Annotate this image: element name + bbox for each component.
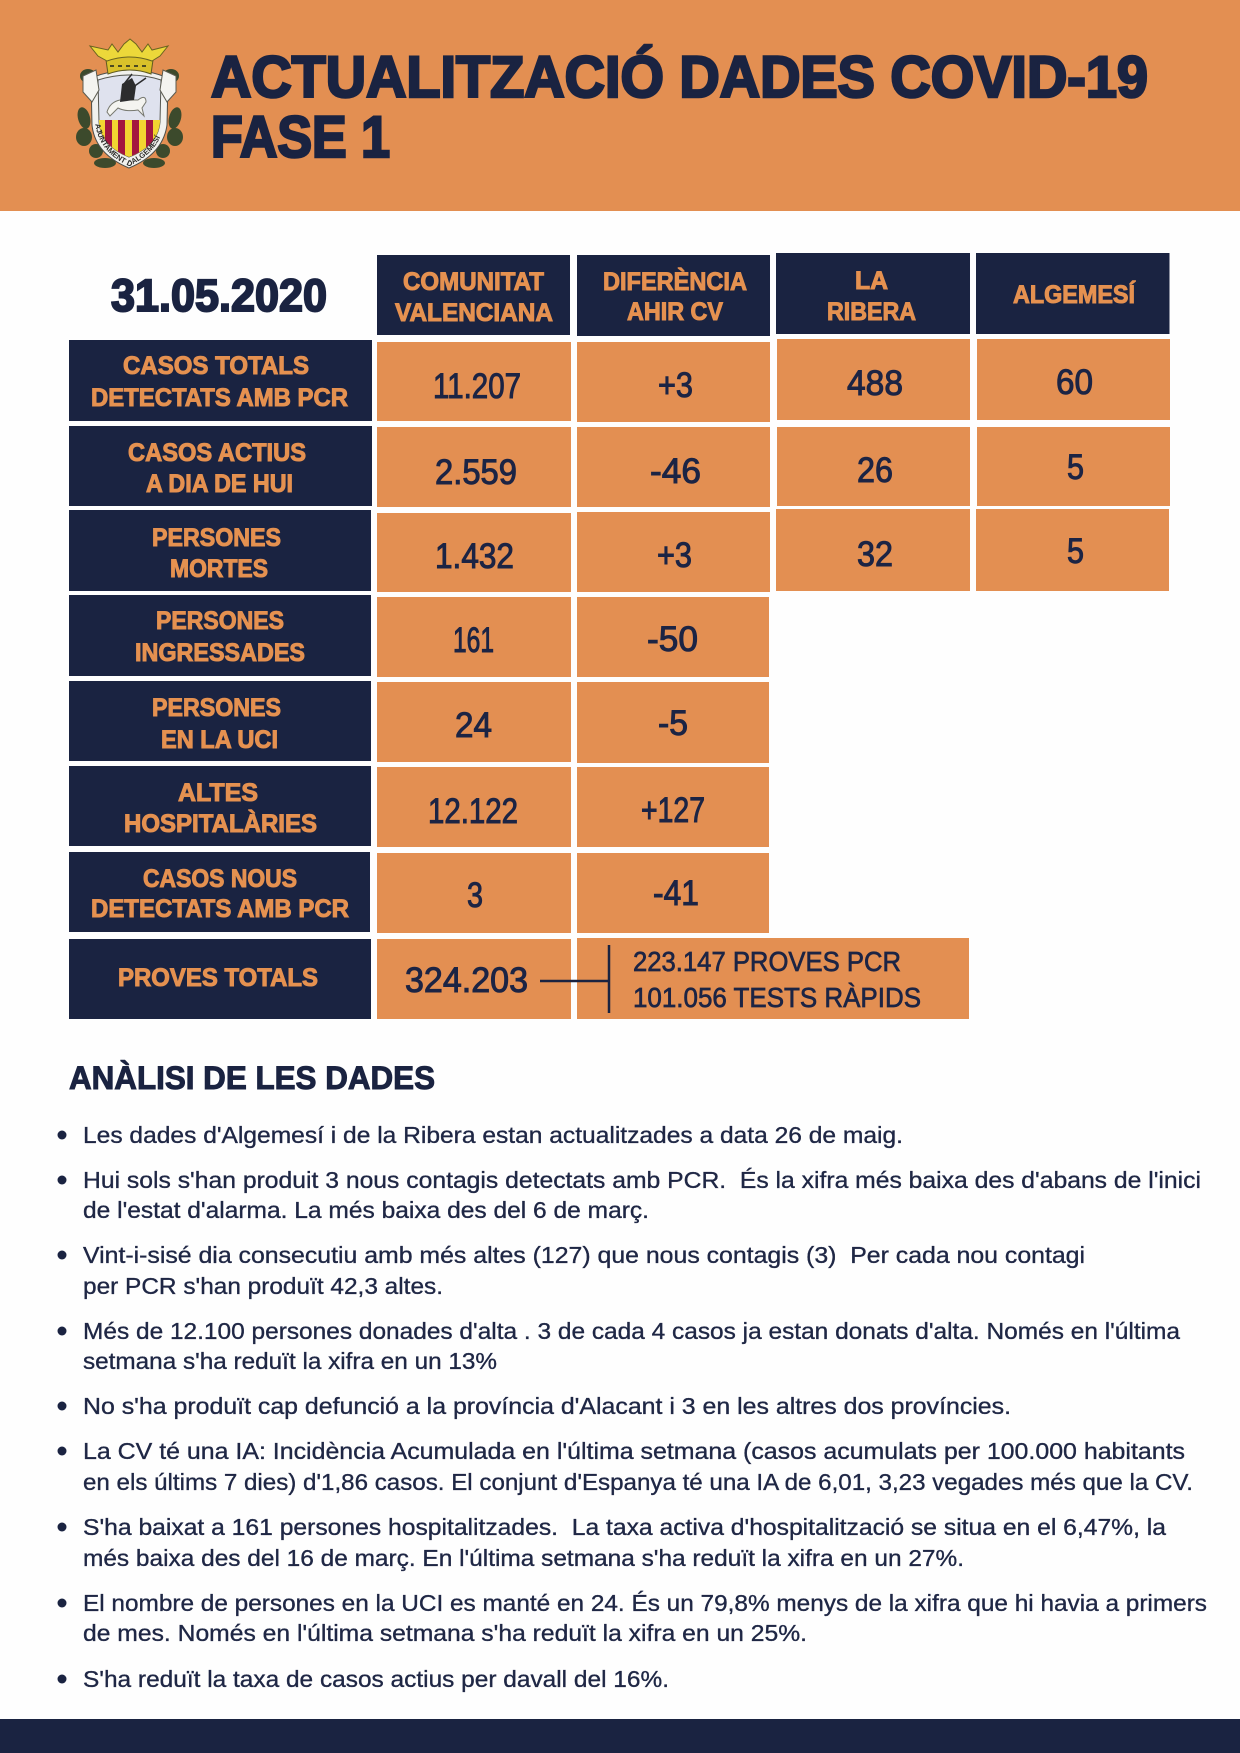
column: Diferència ahir CV values: +127 — [641, 791, 705, 830]
bullet: active case rate: S'ha reduït la taxa de casos actius per davall del 16%. — [83, 1666, 669, 1692]
row label: persones mortes: PERSONES — [152, 524, 281, 552]
column: Diferència ahir CV values: -50 — [647, 620, 698, 659]
column: Comunitat Valenciana values: 24 — [455, 706, 492, 745]
column: Comunitat Valenciana values — [377, 342, 571, 1019]
column: Diferència ahir CV values: +3 — [657, 536, 692, 575]
column header: Algemesí: ALGEMESÍ — [1013, 280, 1136, 309]
column: Comunitat Valenciana values: 1.432 — [435, 537, 514, 576]
column: La Ribera values: 488 — [847, 364, 903, 403]
title: ACTUALITZACIÓ DADES COVID-19 — [211, 45, 1148, 110]
bullet: people discharged: Més de 12.100 persones donades d'alta . 3 de cada 4 casos ja estan donats d'alta. Només en l'última — [83, 1318, 1181, 1344]
bullet: deaths by province: No s'ha produït cap defunció a la província d'Alacant i 3 en les altres dos províncies. — [83, 1393, 1011, 1419]
row label: casos actius: A DIA DE HUI — [146, 470, 293, 498]
section heading: ANÀLISI DE LES DADES — [69, 1060, 435, 1096]
footer band — [0, 1719, 1240, 1753]
row label: casos totals: DETECTATS AMB PCR — [91, 384, 348, 412]
row label: persones mortes: MORTES — [170, 555, 268, 583]
bullet: discharges vs contagions — [58, 1242, 1085, 1299]
row label: persones en la UCI — [69, 681, 371, 761]
bullet: accumulated incidence: La CV té una IA: Incidència Acumulada en l'última setmana (casos acumulats per 100.000 habitants — [83, 1438, 1185, 1464]
title: FASE 1 — [211, 105, 390, 170]
column header: Diferència ahir CV: AHIR CV — [627, 298, 723, 326]
row label: casos nous — [69, 852, 370, 932]
column: Comunitat Valenciana values: 12.122 — [428, 792, 518, 831]
row label: persones ingressades: INGRESSADES — [135, 639, 305, 667]
bullet: new cases — [58, 1167, 1201, 1223]
bullet: discharges vs contagions: Vint-i-sisé dia consecutiu amb més altes (127) que nous contagis (3) Per cada nou contagi — [83, 1242, 1085, 1268]
row label: casos totals: CASOS TOTALS — [123, 352, 309, 380]
header band — [0, 0, 1240, 211]
bullet: ICU: El nombre de persones en la UCI es manté en 24. És un 79,8% menys de la xifra que hi havia a primers — [83, 1590, 1207, 1616]
column: Diferència ahir CV values: +3 — [658, 366, 693, 405]
row label: persones mortes — [69, 510, 371, 591]
bullet: accumulated incidence: en els últims 7 dies) d'1,86 casos. El conjunt d'Espanya té una IA de 6,01, 3,23 vegades més que la CV. — [83, 1469, 1193, 1495]
callout: breakdown of total tests: 101.056 TESTS RÀPIDS — [633, 982, 921, 1013]
column: Diferència ahir CV values: -41 — [653, 874, 699, 913]
callout: breakdown of total tests: 223.147 PROVES PCR — [633, 946, 901, 977]
row label: persones en la UCI: EN LA UCI — [161, 726, 278, 754]
row label: proves totals — [69, 939, 371, 1019]
bullet: data update date: Les dades d'Algemesí i de la Ribera estan actualitzades a data 26 de maig. — [83, 1122, 903, 1148]
column: Diferència ahir CV values — [577, 342, 770, 933]
row label: casos nous: CASOS NOUS — [143, 865, 297, 893]
bullet: hospitalised: més baixa des del 16 de març. En l'última setmana s'ha reduït la xifra en un 27%. — [83, 1545, 964, 1571]
row label: casos actius — [69, 426, 372, 506]
column header: La Ribera — [776, 253, 970, 334]
bullet: new cases: Hui sols s'han produit 3 nous contagis detectats amb PCR. És la xifra més baixa des d'abans de l'inici — [83, 1167, 1201, 1193]
callout: breakdown of total tests — [577, 938, 969, 1019]
column: Diferència ahir CV values: -5 — [658, 704, 688, 743]
row label: altes hospitalàries — [69, 766, 371, 846]
row label: persones ingressades: PERSONES — [156, 607, 284, 635]
bullet: hospitalised — [58, 1514, 1167, 1571]
column header: Diferència ahir CV: DIFERÈNCIA — [603, 267, 747, 296]
row label: persones en la UCI: PERSONES — [152, 694, 281, 722]
column: La Ribera values: 32 — [857, 535, 893, 574]
column: Comunitat Valenciana values: 161 — [453, 621, 494, 660]
row label: persones ingressades — [69, 595, 371, 676]
column: La Ribera values: 26 — [857, 451, 893, 490]
column header: Comunitat Valenciana: VALENCIANA — [395, 299, 553, 327]
row labels column — [69, 340, 372, 1019]
bullet: discharges vs contagions: per PCR s'han produït 42,3 altes. — [83, 1273, 443, 1299]
bullet: ICU: de mes. Només en l'última setmana s'ha reduït la xifra en un 25%. — [83, 1620, 807, 1646]
title — [211, 45, 1148, 170]
icon: Algemesí coat of arms — [76, 38, 183, 168]
bullet: new cases: de l'estat d'alarma. La més baixa des del 6 de març. — [83, 1197, 649, 1223]
row label: casos totals — [69, 340, 372, 421]
column: Diferència ahir CV values: -46 — [650, 452, 701, 491]
column: Algemesí values: 60 — [1056, 363, 1093, 402]
column: Comunitat Valenciana values: 2.559 — [435, 453, 517, 492]
arrow: bracket connector from total to breakdown — [540, 945, 609, 1013]
bullet: people discharged — [58, 1318, 1181, 1374]
date heading: 31.05.2020 — [111, 270, 327, 321]
column: Algemesí values: 5 — [1067, 448, 1084, 487]
column header: La Ribera: LA — [855, 267, 888, 295]
column: Comunitat Valenciana values: 11.207 — [433, 367, 521, 406]
table header row — [377, 253, 1170, 336]
row label: proves totals: PROVES TOTALS — [118, 964, 318, 992]
row label: altes hospitalàries: ALTES — [178, 779, 258, 807]
row label: casos nous: DETECTATS AMB PCR — [91, 895, 349, 923]
bullet: ICU — [58, 1590, 1207, 1646]
bullet: accumulated incidence — [58, 1438, 1193, 1495]
column header: Algemesí — [976, 253, 1170, 334]
column header: Comunitat Valenciana: COMUNITAT — [403, 268, 544, 296]
column: Algemesí values — [976, 339, 1170, 591]
bullet: hospitalised: S'ha baixat a 161 persones hospitalitzades. La taxa activa d'hospitalització se situa en el 6,47%, la — [83, 1514, 1167, 1540]
column header: Comunitat Valenciana — [377, 255, 570, 335]
column: Algemesí values: 5 — [1067, 532, 1084, 571]
bullet: people discharged: setmana s'ha reduït la xifra en un 13% — [83, 1348, 497, 1374]
column: La Ribera values — [776, 339, 970, 591]
column: Comunitat Valenciana values: 324.203 — [405, 961, 528, 1000]
column header: Diferència ahir CV — [577, 255, 770, 336]
row label: casos actius: CASOS ACTIUS — [128, 439, 306, 467]
analysis bullet list — [58, 1122, 1207, 1692]
row label: altes hospitalàries: HOSPITALÀRIES — [124, 809, 317, 838]
icon: Algemesí coat of arms: AJUNTAMENT D'ALGEMESÍ — [95, 124, 160, 166]
column: Comunitat Valenciana values: 3 — [467, 876, 483, 915]
column header: La Ribera: RIBERA — [827, 298, 916, 326]
